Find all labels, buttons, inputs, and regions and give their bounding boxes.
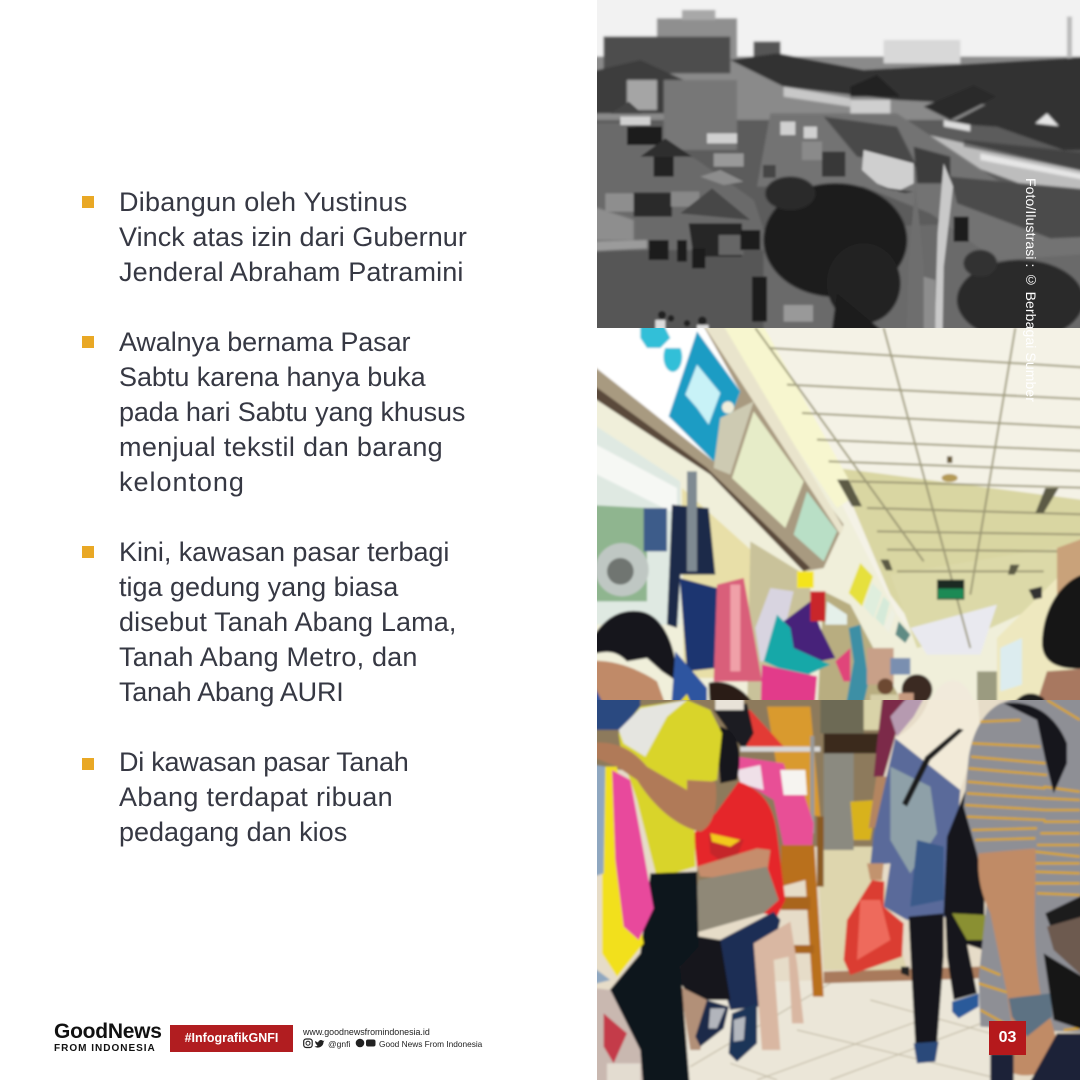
footer: [54, 1020, 482, 1054]
light boxes: [732, 411, 804, 528]
text block 4: Abang terdapat ribuan: [119, 782, 393, 812]
shopper background: [870, 693, 900, 700]
backpack: [944, 787, 985, 950]
hashtag badge: #InfografikGNFI: [185, 1031, 278, 1045]
photo: shoppers in the market aisle: [584, 687, 1080, 1080]
people: [658, 311, 707, 327]
vents and exit sign: [837, 480, 1059, 575]
sneakers: [695, 1000, 729, 1047]
text block 2: [119, 327, 465, 497]
text block 3: Tanah Abang Metro, dan: [119, 642, 418, 672]
text block 1: [119, 187, 467, 287]
logo: GoodNews From Indonesia: GoodNews: [54, 1020, 162, 1043]
man in striped shirt: [964, 687, 1080, 1033]
text block 2: menjual tekstil dan barang: [119, 432, 443, 462]
text block 1: Dibangun oleh Yustinus: [119, 187, 408, 217]
trousers: [909, 913, 944, 1043]
text block 4: pedagang dan kios: [119, 817, 347, 847]
goods bottom left: [597, 988, 645, 1080]
arm: [978, 848, 1060, 1075]
text block 2: pada hari Sabtu yang khusus: [119, 397, 465, 427]
panel: photo column: [597, 0, 1080, 1080]
text block 2: Sabtu karena hanya buka: [119, 362, 426, 392]
hanging rack: [740, 747, 820, 752]
logo: GoodNews From Indonesia: FROM INDONESIA: [54, 1043, 156, 1054]
text block 3: Kini, kawasan pasar terbagi: [119, 537, 449, 567]
red bag: [844, 880, 904, 975]
banners: [912, 208, 920, 226]
text block 1: Vinck atas izin dari Gubernur: [119, 222, 467, 252]
corridor right wall: [996, 579, 1075, 700]
man's head, right: [1042, 575, 1080, 669]
motorcycles: [649, 217, 969, 322]
text block 2: kelontong: [119, 467, 245, 497]
background stalls: [597, 700, 880, 886]
text block 3: disebut Tanah Abang Lama,: [119, 607, 457, 637]
website and social handles: www.goodnewsfromindonesia.id: [303, 1027, 430, 1037]
dresses: [755, 588, 794, 661]
text block 2: Awalnya bernama Pasar: [119, 327, 410, 357]
held clothes: [602, 767, 644, 977]
photo credit: Foto/Ilustrasi : © Berbagai Sumber: [1023, 178, 1039, 402]
man in yellow shirt: [619, 700, 722, 878]
shop frame: [584, 315, 844, 571]
hanging jeans: [667, 505, 715, 628]
pink stool: [754, 922, 804, 1050]
bullet marker 2: [82, 336, 94, 348]
wooden stool: [781, 845, 824, 997]
text block 3: tiga gedung yang biasa: [119, 572, 398, 602]
bullet marker 1: [82, 196, 94, 208]
road: [584, 123, 1080, 343]
text block 3: Tanah Abang AURI: [119, 677, 344, 707]
page number badge: 03: [999, 1029, 1016, 1046]
tree: [764, 177, 1080, 343]
ceiling grid: [755, 328, 1080, 648]
bullet marker 3: [82, 546, 94, 558]
text block 3: [119, 537, 457, 707]
website and social handles: @gnfi: [328, 1038, 350, 1048]
page number badge: [989, 1021, 1026, 1055]
crowds: [824, 117, 917, 167]
website and social handles: Good News From Indonesia: [379, 1038, 482, 1048]
photo: black and white historic market street: [584, 0, 1080, 343]
kiosks: [640, 138, 692, 157]
hashtag badge: [170, 1025, 293, 1052]
photo: modern market interior: [597, 328, 1080, 700]
text block 4: Di kawasan pasar Tanah: [119, 747, 408, 777]
blue yoyo sign: [597, 328, 740, 461]
man with yellow shirt: head: [597, 660, 665, 700]
woman in batik coat: [872, 700, 907, 778]
website and social handles: [303, 1027, 482, 1048]
logo: GoodNews From Indonesia: [54, 1020, 162, 1054]
stall and merchandise: [597, 427, 681, 625]
text block 4: [119, 747, 408, 847]
bullet marker 4: [82, 758, 94, 770]
seated woman, red superman shirt: [719, 727, 740, 783]
floor: [687, 977, 990, 1080]
text block 1: Jenderal Abraham Patramini: [119, 257, 464, 287]
